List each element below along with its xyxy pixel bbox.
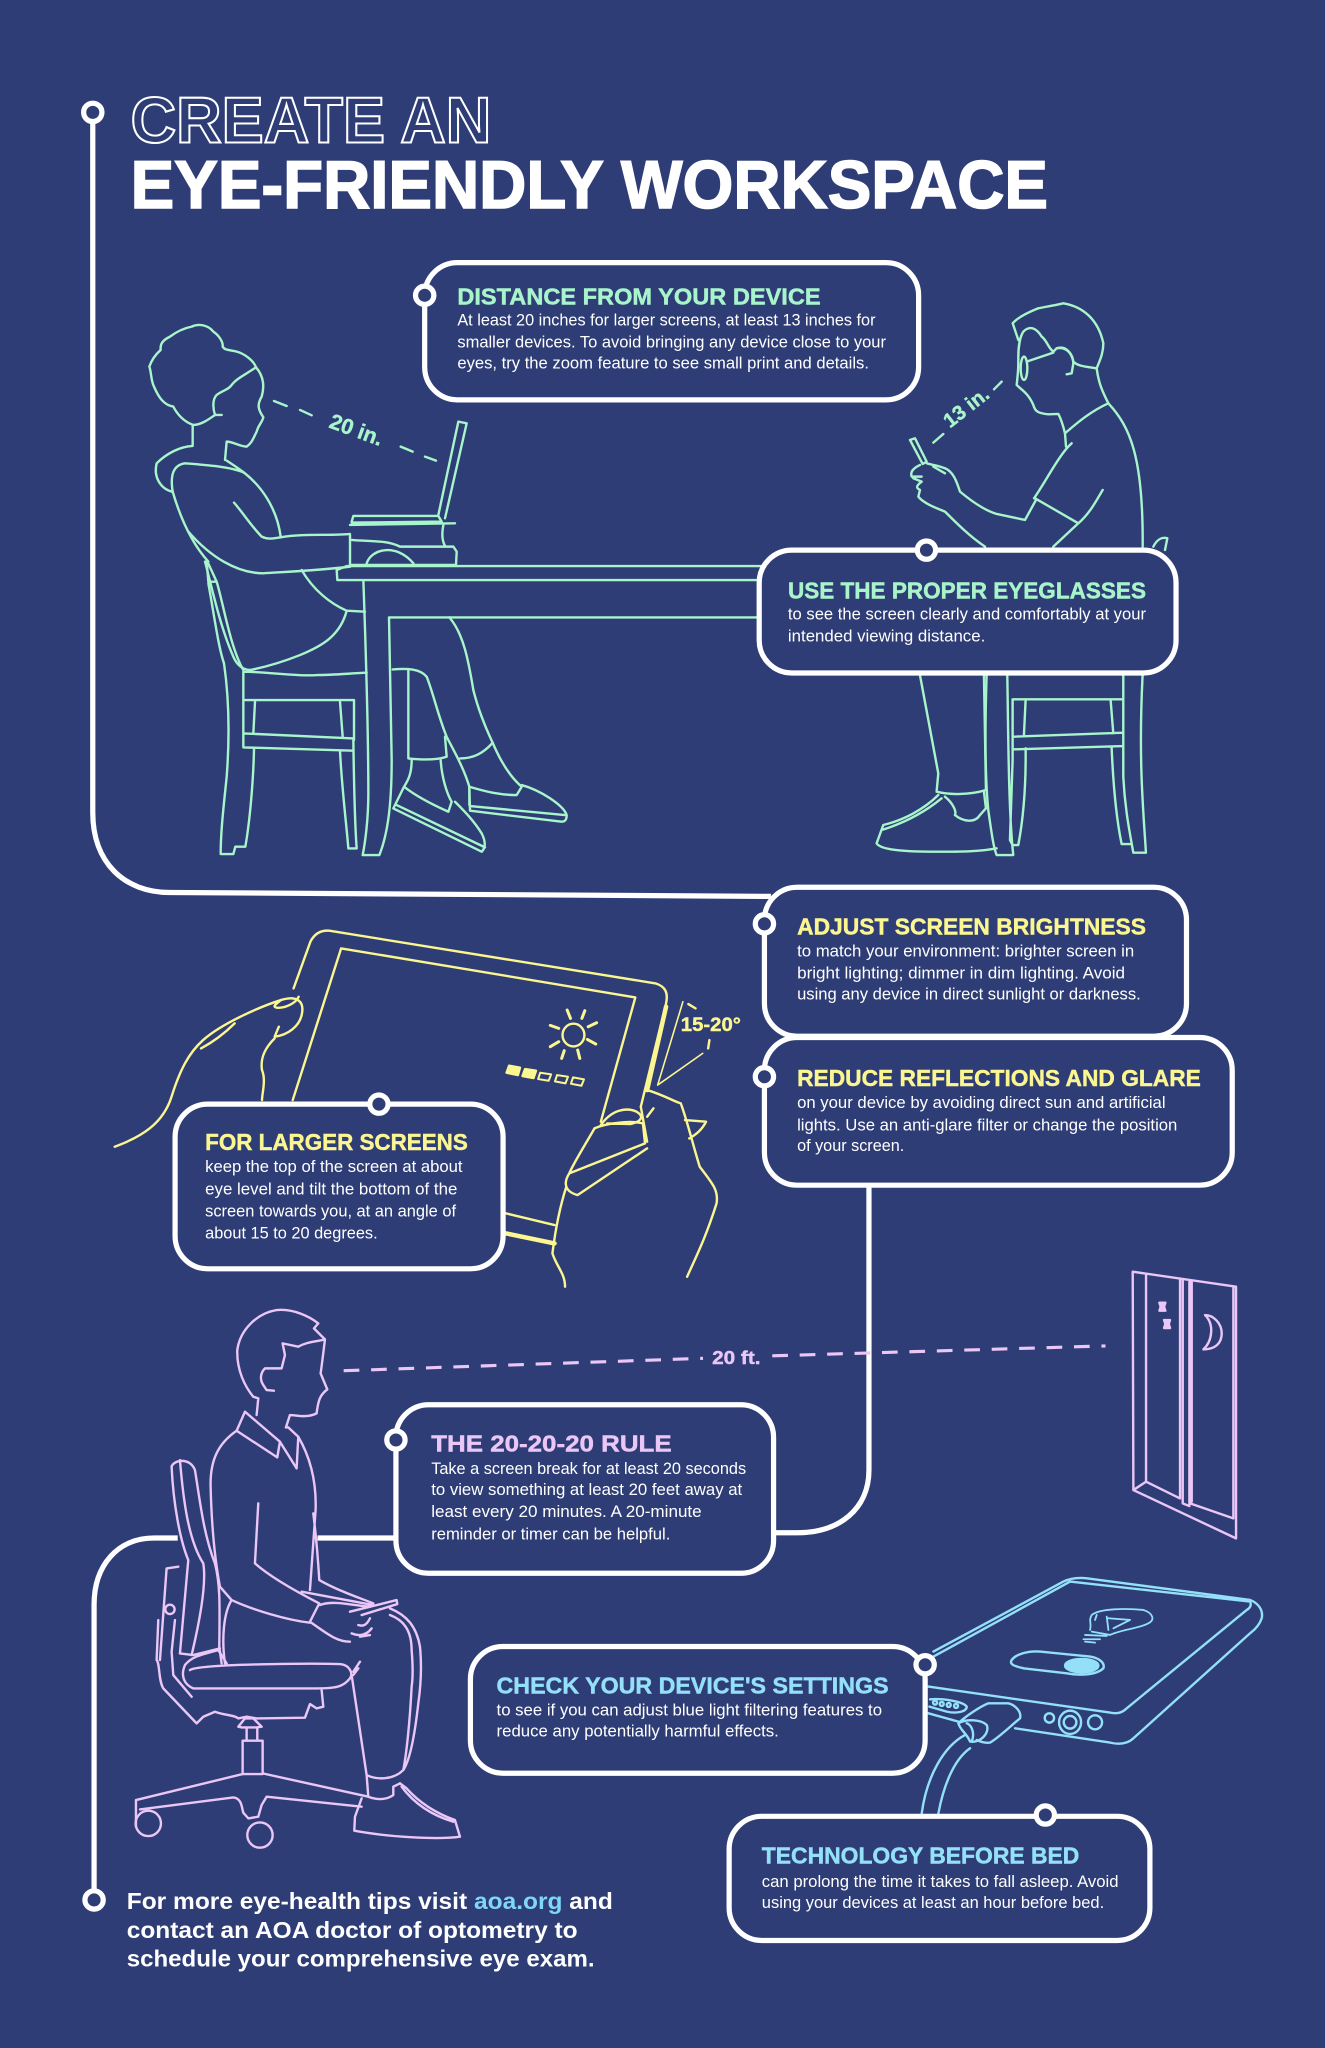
dashes: 20 in.: [274, 401, 436, 461]
collar: [237, 1412, 298, 1468]
illustration: woman upper body with laptop on books: [149, 325, 467, 670]
panel: the 20-20-20 rule: Take a screen break for at least 20 seconds: [431, 1460, 746, 1478]
table: [337, 566, 833, 855]
end marker: [85, 1891, 103, 1909]
tablet thick edges: [506, 1007, 666, 1243]
panel: check your device's settings: to see if you can adjust blue light filtering features to: [497, 1702, 882, 1720]
title: CREATE AN: [131, 83, 491, 156]
woman's hair and face: [149, 325, 263, 460]
label: 20 in.: 20 in.: [326, 408, 387, 451]
phone: [910, 438, 927, 464]
illustration: man upper body with phone: [910, 303, 1167, 550]
head: [237, 1310, 327, 1427]
bulb icon: [1083, 1609, 1152, 1643]
illustration: seated man upper body: [160, 1310, 420, 1663]
footer call to action: contact an AOA doctor of optometry to: [127, 1917, 578, 1943]
panel: the 20-20-20 rule: THE 20-20-20 RULE: [431, 1431, 672, 1457]
panel: reduce reflections and glare: lights. Use an anti-glare filter or change the position: [797, 1116, 1177, 1134]
arm and hand: [255, 1503, 373, 1642]
brightness slider: [507, 1066, 584, 1086]
footer call to action: For more eye-health tips visit aoa.org and: [127, 1888, 613, 1914]
chair column: [238, 1718, 263, 1774]
man's shirt and arms: [927, 403, 1143, 547]
panel: use the proper eyeglasses: to see the screen clearly and comfortably at your: [788, 605, 1147, 623]
window frame: [1133, 1272, 1236, 1538]
panel: adjust screen brightness: ADJUST SCREEN BRIGHTNESS: [797, 913, 1146, 939]
panel: technology before bed: TECHNOLOGY BEFORE BED: [762, 1842, 1079, 1868]
moon: [1203, 1315, 1222, 1349]
panel: reduce reflections and glare: on your device by avoiding direct sun and artificial: [797, 1094, 1166, 1112]
panel: the 20-20-20 rule: [387, 1405, 774, 1573]
panel: adjust screen brightness: [755, 887, 1186, 1036]
stacked books and mouse: [350, 516, 457, 567]
chair top: [1153, 538, 1167, 550]
panel: for larger screens: eye level and tilt the bottom of the: [205, 1180, 457, 1198]
panel: adjust screen brightness: to match your environment: brighter screen in: [797, 943, 1134, 961]
panel: reduce reflections and glare: of your screen.: [797, 1137, 904, 1155]
panel: use the proper eyeglasses: intended viewing distance.: [788, 628, 985, 646]
panel: reduce reflections and glare: [755, 1038, 1232, 1185]
panel: the 20-20-20 rule: reminder or timer can be helpful.: [431, 1525, 670, 1543]
panel: the 20-20-20 rule: to view something at least 20 feet away at: [431, 1481, 743, 1499]
woman's hoodie and arms: [156, 446, 350, 670]
footer call to action: [127, 1888, 613, 1972]
shoe: [354, 1783, 460, 1838]
panel: check your device's settings: CHECK YOUR DEVICE'S SETTINGS: [497, 1672, 889, 1698]
chair frame: [157, 1620, 323, 1723]
connector line: middle section: [771, 1183, 869, 1533]
illustration: woman lower body, chair and table: [207, 560, 833, 855]
woman's chair: [207, 560, 367, 854]
toggle icon: [1011, 1651, 1104, 1675]
label: 15-20 degrees: 15-20°: [681, 1015, 741, 1036]
panel: technology before bed: can prolong the time it takes to fall asleep. Avoid: [762, 1873, 1119, 1891]
title: [131, 83, 1048, 223]
laptop: [438, 422, 467, 518]
illustration: hands holding a tablet: [115, 931, 717, 1287]
chair back: [160, 1460, 222, 1663]
panel: distance from your device: DISTANCE FROM YOUR DEVICE: [457, 283, 821, 309]
panel: reduce reflections and glare: REDUCE REFLECTIONS AND GLARE: [797, 1065, 1201, 1091]
connector line: lower section: [94, 1538, 399, 1892]
thigh: [390, 1608, 420, 1650]
panel: for larger screens: FOR LARGER SCREENS: [205, 1129, 468, 1155]
angle arc ticks: [688, 1004, 709, 1048]
illustration: window with moon: [1133, 1272, 1236, 1538]
panel: check your device's settings: reduce any potentially harmful effects.: [497, 1723, 779, 1741]
man's trousers and shoe: [877, 675, 997, 852]
phone body: [928, 1578, 1262, 1744]
trouser legs: [352, 1647, 421, 1799]
chair base: [136, 1773, 368, 1827]
man's chair: [986, 675, 1146, 855]
panel: distance from your device: At least 20 inches for larger screens, at least 13 inches for: [457, 311, 876, 329]
casters: [136, 1811, 273, 1848]
torso: [211, 1431, 373, 1663]
panel: distance from your device: eyes, try the zoom feature to see small print and details.: [457, 354, 869, 372]
panel: use the proper eyeglasses: [759, 541, 1176, 673]
title: EYE-FRIENDLY WORKSPACE: [131, 147, 1048, 223]
panel: adjust screen brightness: using any device in direct sunlight or darkness.: [797, 986, 1141, 1004]
label: 20 ft.: 20 ft.: [712, 1347, 761, 1368]
panel: the 20-20-20 rule: least every 20 minutes. A 20-minute: [431, 1503, 702, 1521]
ports: [929, 1699, 1102, 1734]
illustration: phone with cable: [922, 1578, 1262, 1813]
angle marker: [658, 1002, 703, 1085]
pen: [350, 1600, 397, 1615]
start marker: [84, 103, 102, 122]
left hand: [115, 997, 302, 1147]
illustration: man lower body and chair: [877, 675, 1146, 855]
panel: technology before bed: [729, 1806, 1150, 1940]
label: 13 in.: 13 in.: [940, 383, 994, 433]
tablet: [293, 931, 667, 1225]
panel: for larger screens: keep the top of the screen at about: [205, 1158, 463, 1176]
man's hand: [911, 465, 985, 547]
man's hair and face: [1013, 303, 1108, 447]
panel: check your device's settings: [470, 1646, 934, 1773]
connector line: top section: [93, 120, 771, 896]
sight line: 20 ft.: [344, 1346, 1105, 1371]
woman's lap and legs: [250, 570, 493, 805]
cable: [922, 1703, 1020, 1813]
right hand: [552, 1090, 717, 1287]
panel: adjust screen brightness: bright lighting; dimmer in dim lighting. Avoid: [797, 965, 1125, 983]
woman's shoes: [393, 743, 567, 852]
footer call to action: schedule your comprehensive eye exam.: [127, 1946, 595, 1972]
panel: for larger screens: about 15 to 20 degrees.: [205, 1225, 378, 1243]
panel: use the proper eyeglasses: USE THE PROPER EYEGLASSES: [788, 577, 1146, 603]
panel: technology before bed: using your devices at least an hour before bed.: [762, 1894, 1104, 1912]
stars: [1159, 1303, 1170, 1328]
panel: distance from your device: smaller devices. To avoid bringing any device close to your: [457, 334, 887, 352]
glasses: [1021, 353, 1053, 380]
sun icon: [550, 1010, 597, 1058]
seat: [183, 1650, 360, 1688]
dashes: 13 in.: [933, 382, 1002, 443]
panel: for larger screens: [175, 1095, 503, 1269]
panel: for larger screens: screen towards you, at an angle of: [205, 1203, 457, 1221]
illustration: seated man legs and office chair base: [136, 1620, 460, 1848]
panel: distance from your device: [416, 263, 919, 400]
